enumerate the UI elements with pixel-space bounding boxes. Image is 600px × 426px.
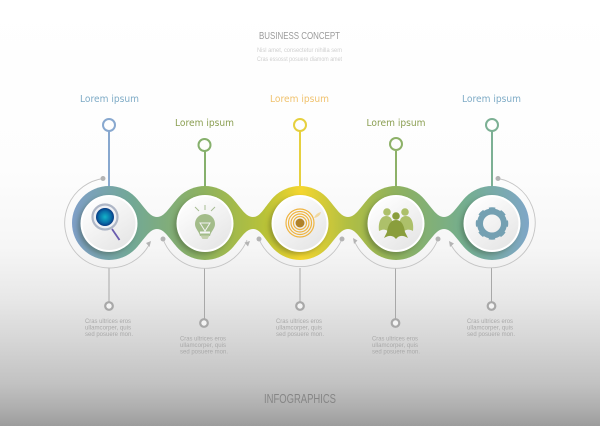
icon: light bulb: [195, 205, 215, 239]
footer label: INFOGRAPHICS: [264, 391, 336, 406]
step descriptions: ullamcorper, quis: [372, 343, 418, 349]
bottom stems and markers: [105, 268, 495, 327]
step descriptions: ullamcorper, quis: [467, 326, 513, 332]
connected ribbon band: [72, 186, 529, 260]
step descriptions: Cras ultrices eros: [372, 336, 418, 342]
step descriptions: ullamcorper, quis: [180, 343, 226, 349]
step descriptions: Cras ultrices eros: [85, 319, 131, 325]
step descriptions: ullamcorper, quis: [276, 326, 322, 332]
top stems and rings: [103, 119, 498, 190]
step headings: [80, 94, 521, 129]
white discs: [80, 195, 520, 252]
icon: gear: [478, 209, 506, 238]
step descriptions: ullamcorper, quis: [85, 326, 131, 332]
step descriptions: sed posuere mon.: [276, 332, 324, 338]
step descriptions: sed posuere mon.: [180, 350, 228, 356]
step descriptions: Cras ultrices eros: [467, 319, 513, 325]
step descriptions: Cras ultrices eros: [276, 319, 322, 325]
step descriptions: sed posuere mon.: [372, 350, 420, 356]
step descriptions: sed posuere mon.: [85, 332, 133, 338]
step headings: Lorem ipsum: [366, 118, 426, 129]
step descriptions: sed posuere mon.: [467, 332, 515, 338]
icon: magnifier: [92, 204, 120, 240]
icon: target: [286, 209, 321, 237]
disc shadows: [78, 198, 518, 254]
icon: people group: [379, 208, 413, 239]
subtitle: Cras essosst posuere diamom amet: [257, 56, 342, 63]
title: BUSINESS CONCEPT: [259, 31, 340, 42]
thin arc arrows: [65, 176, 535, 268]
step descriptions: Cras ultrices eros: [180, 336, 226, 342]
step headings: Lorem ipsum: [462, 94, 521, 105]
step descriptions: [85, 319, 515, 356]
step headings: Lorem ipsum: [270, 94, 329, 105]
step headings: Lorem ipsum: [175, 118, 234, 129]
step headings: Lorem ipsum: [80, 94, 139, 105]
subtitle: Nisl amet, consectetur nihilla sem: [257, 47, 342, 54]
subtitle: [257, 47, 342, 63]
